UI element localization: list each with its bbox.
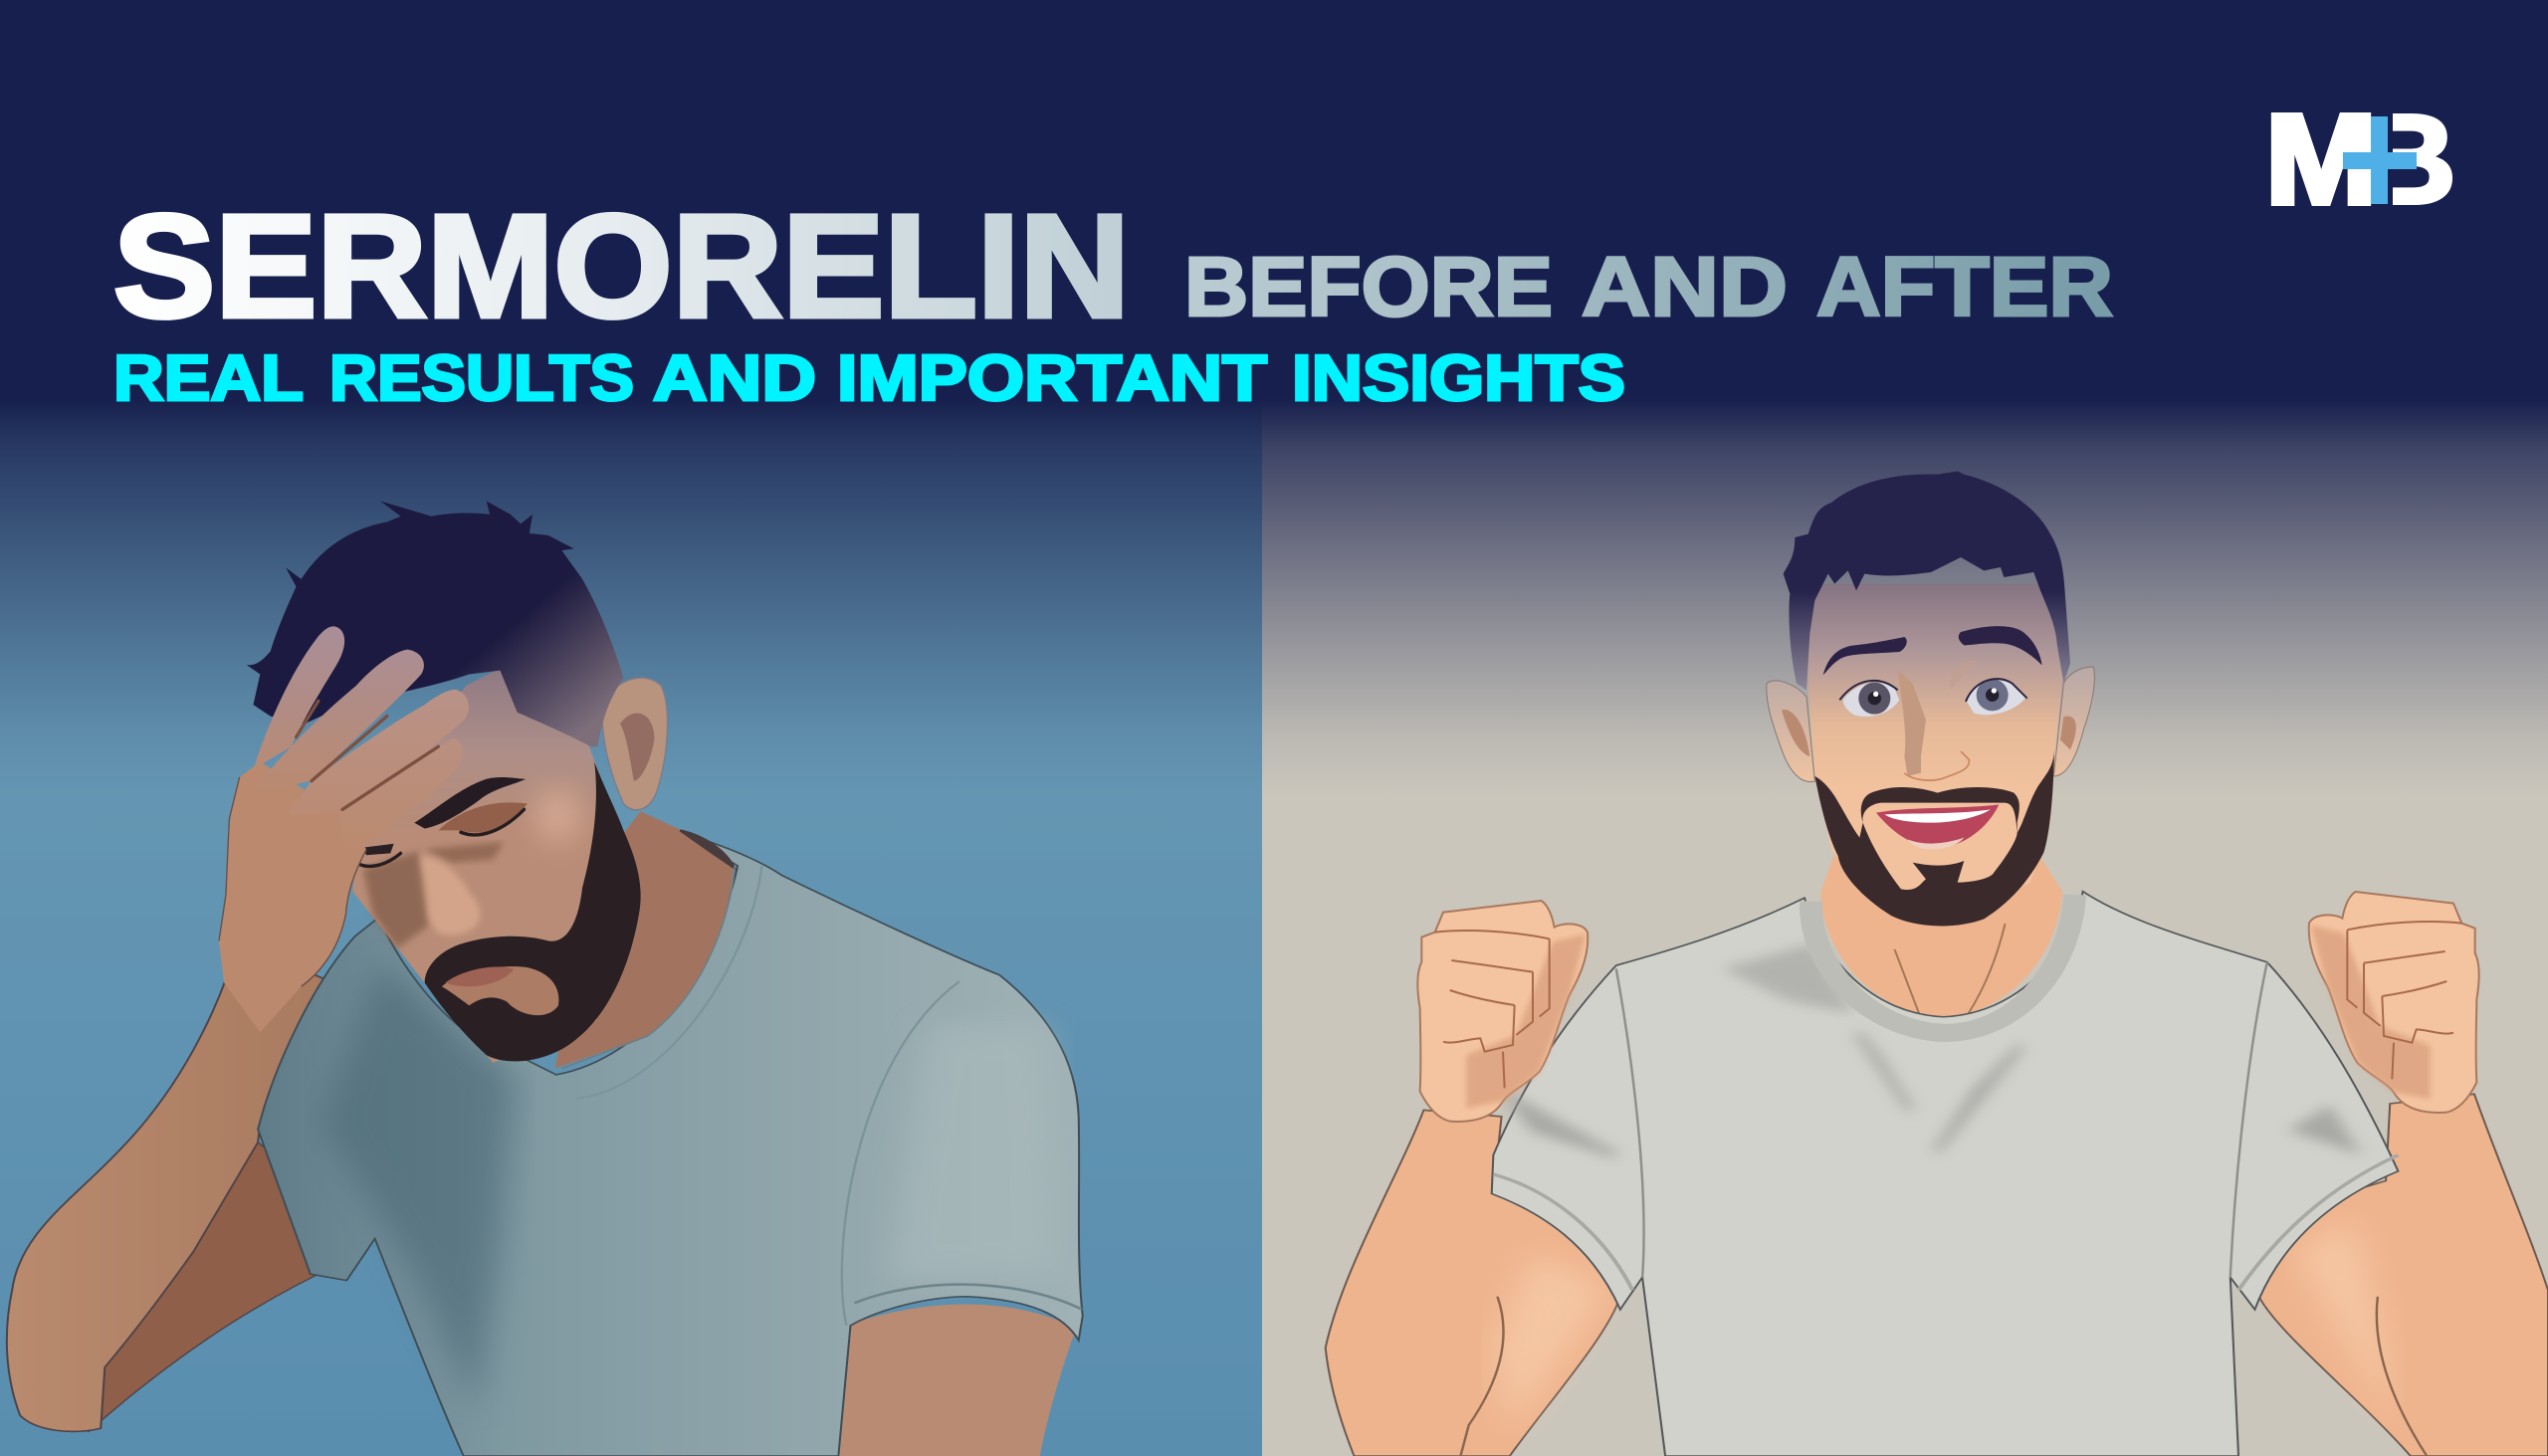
logo: MHB: B <box>2361 89 2456 231</box>
subtitle: IMPORTANT <box>837 341 1267 414</box>
subtitle: AND <box>653 341 816 414</box>
icon: left raised fist <box>1417 901 1588 1122</box>
gradient overlay: navy fade <box>0 396 2548 799</box>
title: Sermorelin: SERMORELIN <box>113 185 1130 348</box>
heading: before and after: AND <box>1582 240 1788 333</box>
panel background: after <box>1262 396 2548 1456</box>
panel: after <box>1262 396 2548 1456</box>
panel: before <box>0 396 1262 1456</box>
subtitle: REAL <box>113 341 304 414</box>
heading: before and after: BEFORE <box>1184 240 1553 333</box>
illustration: torso and arms of the happy man <box>1326 847 2548 1456</box>
icon: right raised fist <box>2309 892 2479 1113</box>
heading: before and after: AFTER <box>1816 240 2113 333</box>
logo: MHB: M <box>2265 89 2377 231</box>
subtitle: INSIGHTS <box>1292 341 1625 414</box>
illustration: happy man's head <box>1767 471 2094 926</box>
subtitle <box>113 341 1625 414</box>
subtitle: RESULTS <box>329 341 634 414</box>
heading: before and after <box>1184 240 2113 333</box>
illustration: torso and arms of the tired man <box>7 834 1083 1456</box>
illustration: tired man's head and hand <box>219 501 735 1069</box>
panel background: before <box>0 396 1262 1456</box>
logo: MHB <box>2271 112 2452 206</box>
